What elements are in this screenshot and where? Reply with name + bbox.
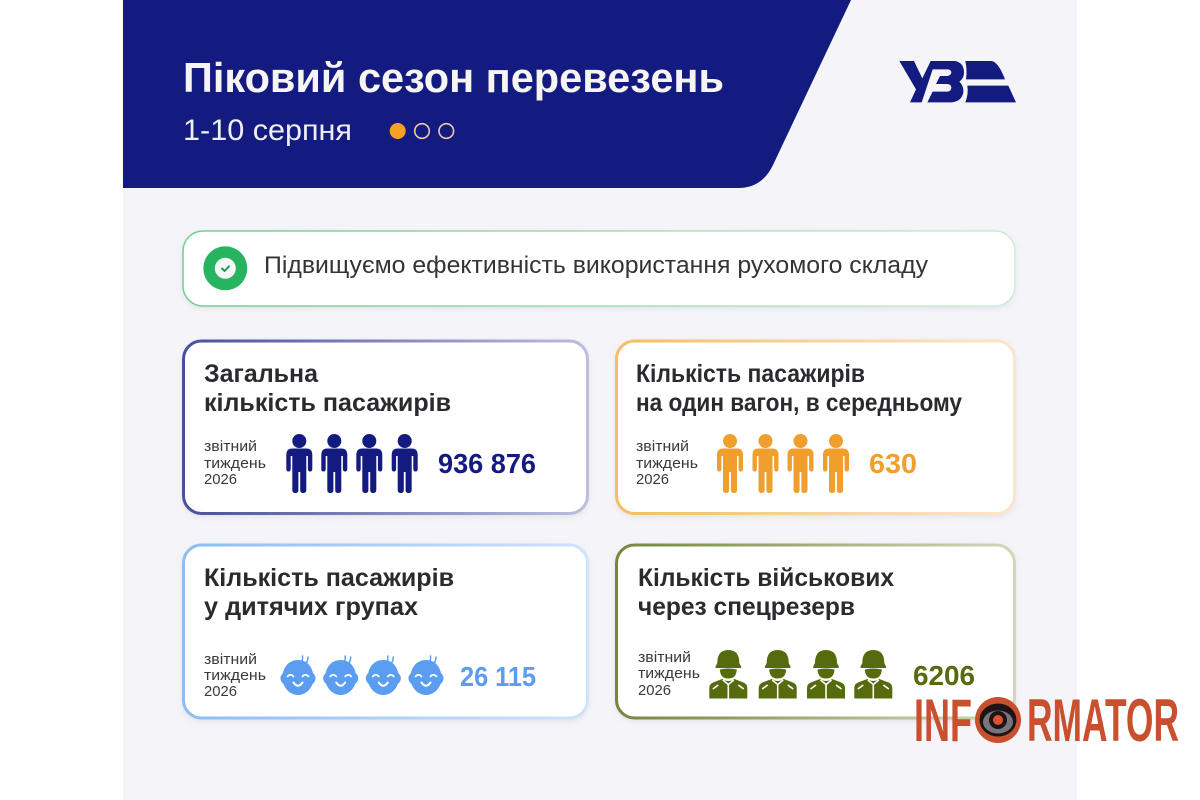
icon: eye bbox=[975, 697, 1021, 743]
period label: тиждень bbox=[204, 667, 266, 684]
heading: у дитячих групах bbox=[204, 593, 418, 621]
icons: soldiers bbox=[709, 650, 892, 698]
value: 26 115 bbox=[460, 661, 536, 692]
watermark: Informator: INF bbox=[914, 687, 972, 754]
heading: Кількість пасажирів bbox=[636, 360, 865, 388]
value: 6206 bbox=[913, 660, 975, 691]
panel: key message banner bbox=[183, 231, 1015, 306]
heading: Кількість пасажирів bbox=[204, 564, 454, 592]
period label: 2026 bbox=[204, 683, 237, 700]
value: 936 876 bbox=[438, 448, 536, 479]
period label: звітний bbox=[204, 651, 257, 668]
period label: звітний bbox=[638, 649, 691, 666]
heading: кількість пасажирів bbox=[204, 389, 451, 417]
icons: people bbox=[717, 434, 849, 493]
period label: тиждень bbox=[638, 665, 700, 682]
logo: UZ railways bbox=[899, 61, 1016, 102]
value: 630 bbox=[869, 448, 917, 479]
watermark: Informator bbox=[914, 687, 1179, 754]
panel: total passengers bbox=[184, 341, 588, 514]
subtitle: dates: 1-10 серпня bbox=[183, 114, 352, 147]
header banner bbox=[123, 0, 851, 188]
icons: babies bbox=[280, 656, 444, 695]
banner text: Підвищуємо ефективність використання рухомого складу bbox=[264, 252, 928, 279]
period label: 2026 bbox=[636, 471, 669, 488]
heading: Загальна bbox=[204, 360, 319, 388]
heading: на один вагон, в середньому bbox=[636, 389, 962, 417]
panel: military via special reserve bbox=[616, 545, 1014, 718]
period label: 2026 bbox=[638, 682, 671, 699]
period label: звітний bbox=[204, 438, 257, 455]
period label: тиждень bbox=[204, 455, 266, 472]
panel: passengers in children's groups bbox=[184, 545, 588, 718]
page panel background bbox=[123, 0, 1077, 800]
heading: через спецрезерв bbox=[638, 593, 855, 621]
period label: 2026 bbox=[204, 471, 237, 488]
heading: Кількість військових bbox=[638, 564, 894, 592]
period label: звітний bbox=[636, 438, 689, 455]
progress dots bbox=[390, 123, 454, 139]
title: Піковий сезон перевезень bbox=[183, 54, 724, 101]
period label: тиждень bbox=[636, 455, 698, 472]
icons: people bbox=[286, 434, 418, 493]
icon: check mark bbox=[203, 246, 247, 290]
panel: passengers per wagon bbox=[616, 341, 1014, 514]
